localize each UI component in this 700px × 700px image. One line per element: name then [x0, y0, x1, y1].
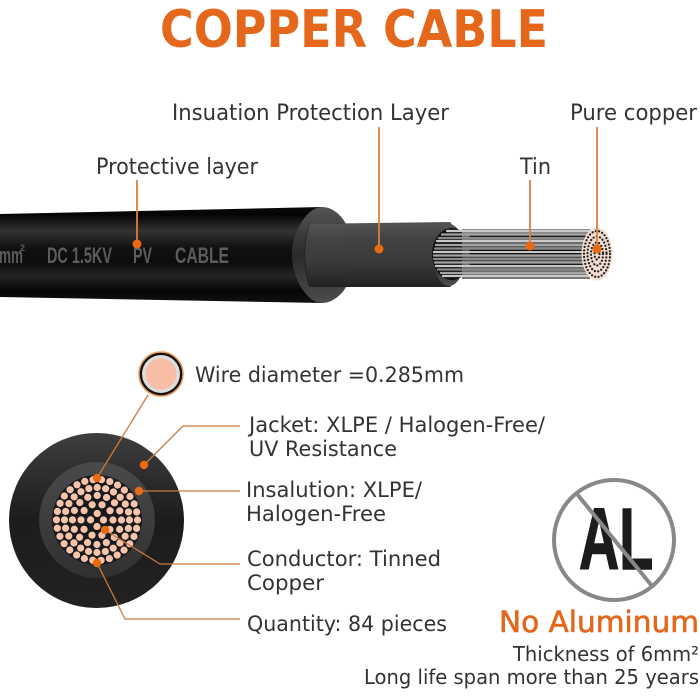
leader: insulation — [135, 487, 240, 495]
wire detail circle — [139, 352, 183, 396]
leader: jacket — [140, 426, 240, 469]
label: jacket: UV Resistance — [249, 437, 397, 461]
text: life span: Long life span more than 25 years — [364, 665, 699, 689]
label: tin: Tin — [519, 155, 551, 180]
label: wire diameter: Wire diameter =0.285mm — [195, 363, 464, 387]
label: insulation protection layer: Insuation Protection Layer — [172, 101, 450, 126]
leader: protective layer — [132, 180, 142, 248]
leader: insulation layer — [374, 127, 384, 254]
cable print: PV — [133, 243, 152, 268]
leader: pure copper — [592, 127, 602, 254]
cable print: DC 1.5KV — [47, 243, 112, 268]
leader: quantity — [93, 559, 240, 619]
label: pure copper: Pure copper — [570, 101, 698, 126]
cable illustration — [0, 207, 612, 303]
label: insulation — [246, 478, 423, 526]
cable print: CABLE — [175, 243, 229, 268]
cable print — [0, 243, 229, 268]
label: jacket: Jacket: XLPE / Halogen-Free/ — [247, 413, 546, 437]
wire end face — [582, 228, 612, 280]
insulation sleeve — [300, 222, 472, 287]
jacket end face — [292, 207, 346, 303]
label: conductor: Copper — [247, 571, 324, 595]
cable print: mm — [0, 243, 23, 268]
copper strands — [56, 480, 138, 560]
label: jacket — [247, 413, 546, 461]
label: conductor — [247, 547, 441, 595]
label: insulation: Insalution: XLPE/ — [246, 478, 423, 502]
label: conductor: Conductor: Tinned — [247, 547, 441, 571]
label: quantity: Quantity: 84 pieces — [247, 612, 447, 636]
bare tinned wires — [434, 229, 590, 279]
title: COPPER CABLE — [160, 0, 548, 60]
outer jacket — [0, 207, 322, 303]
cable cross-section — [9, 433, 184, 608]
heading: no aluminum: No Aluminum — [499, 605, 699, 639]
label: protective layer: Protective layer — [96, 155, 259, 180]
cable print: 2 — [20, 243, 25, 253]
leader: wire diameter — [93, 395, 148, 482]
icon: no aluminum — [554, 480, 674, 600]
leader: tin — [526, 180, 534, 250]
leader: conductor — [101, 526, 240, 564]
icon: no aluminum: AL — [579, 492, 653, 588]
text: thickness: Thickness of 6mm² — [512, 642, 699, 666]
label: insulation: Halogen-Free — [246, 502, 386, 526]
